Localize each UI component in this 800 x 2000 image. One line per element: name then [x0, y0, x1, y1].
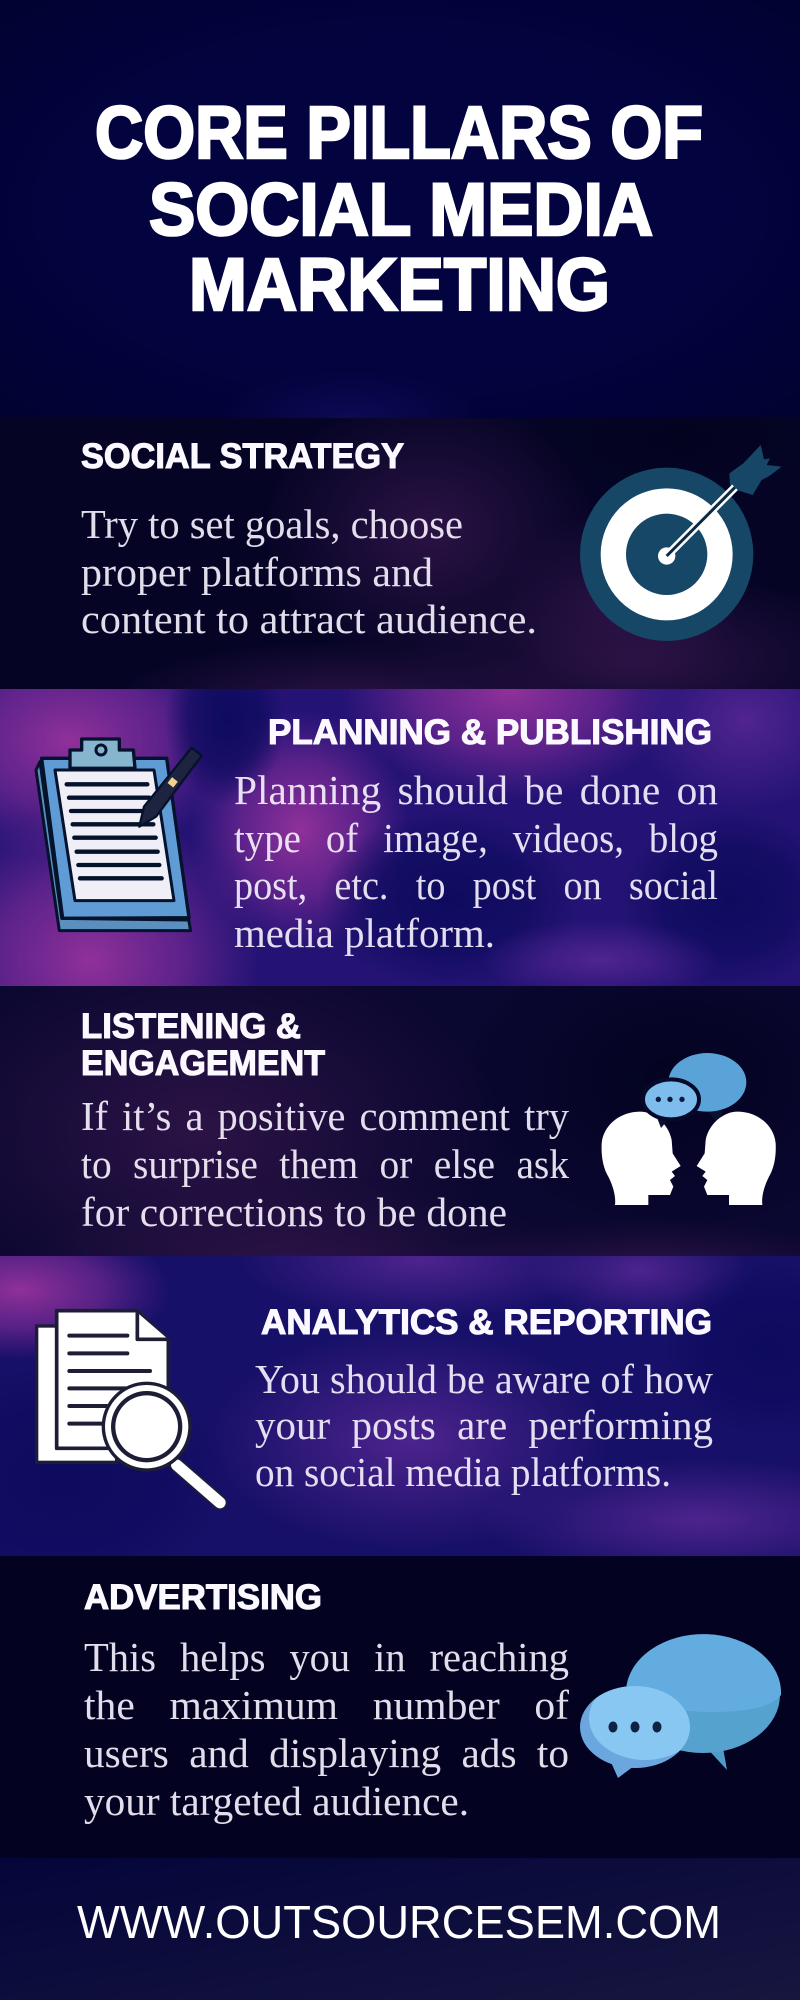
text block: planning and publishing: Planning should be done on: [234, 767, 718, 813]
heading: listening and engagement: LISTENING &: [81, 1007, 301, 1046]
text block: advertising: users and displaying ads to: [84, 1730, 569, 1776]
text block: planning and publishing: type of image, videos, blog: [234, 815, 718, 861]
text block: advertising: the maximum number of: [84, 1682, 569, 1728]
heading: advertising: ADVERTISING: [84, 1578, 322, 1617]
title: SOCIAL MEDIA: [149, 168, 653, 251]
panel: social strategy: [0, 418, 800, 689]
heading: listening and engagement: ENGAGEMENT: [81, 1044, 325, 1083]
panel: planning and publishing: [0, 689, 800, 986]
text block: social strategy: Try to set goals, choose: [81, 501, 463, 547]
heading: planning and publishing: PLANNING & PUBLISHING: [268, 713, 712, 752]
text block: planning and publishing: [234, 767, 718, 956]
icon: document and magnifier: [37, 1311, 220, 1503]
text block: social strategy: proper platforms and: [81, 549, 433, 595]
panel: analytics and reporting: [0, 1256, 800, 1556]
title: MARKETING: [189, 243, 610, 326]
icon: speech bubbles: [580, 1634, 781, 1778]
text block: listening and engagement: If it’s a positive comment try: [81, 1093, 569, 1139]
icon: clipboard and pen: [36, 739, 202, 931]
footer website url: WWW.OUTSOURCESEM.COM: [77, 1896, 721, 1948]
panel: header: [0, 0, 800, 418]
heading: analytics and reporting: ANALYTICS & REPORTING: [261, 1303, 712, 1342]
panel: advertising: [0, 1556, 800, 1858]
panel: footer: [0, 1858, 800, 2000]
title: CORE PILLARS OF: [95, 91, 703, 174]
title: [95, 91, 703, 326]
text block: listening and engagement: [81, 1093, 569, 1235]
icon: target with arrow: [580, 445, 782, 641]
text block: listening and engagement: for corrections to be done: [81, 1189, 507, 1235]
panel: listening and engagement: [0, 986, 800, 1256]
text block: analytics and reporting: on social media platforms.: [255, 1449, 671, 1495]
text block: listening and engagement: to surprise them or else ask: [81, 1141, 569, 1187]
text block: planning and publishing: media platform.: [234, 910, 495, 956]
icon: two heads talking: [602, 1053, 776, 1205]
text block: planning and publishing: post, etc. to post on social: [234, 862, 718, 908]
text block: social strategy: content to attract audience.: [81, 596, 537, 642]
text block: analytics and reporting: your posts are performing: [255, 1402, 713, 1448]
heading: listening and engagement: [81, 1007, 325, 1083]
text block: advertising: your targeted audience.: [84, 1778, 469, 1824]
text block: social strategy: [81, 501, 537, 642]
text block: analytics and reporting: [255, 1356, 713, 1495]
heading: social strategy: SOCIAL STRATEGY: [81, 437, 404, 476]
text block: advertising: This helps you in reaching: [84, 1634, 569, 1680]
text block: advertising: [84, 1634, 569, 1824]
text block: analytics and reporting: You should be aware of how: [255, 1356, 713, 1402]
